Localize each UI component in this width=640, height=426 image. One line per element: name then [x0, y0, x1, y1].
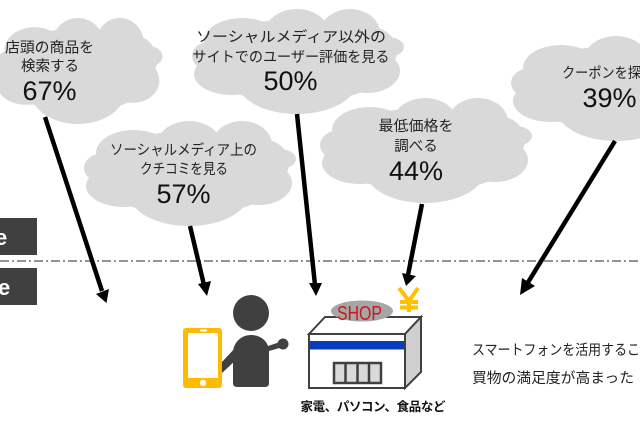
cloud: check lowest price 44%: 調べる [394, 139, 438, 155]
cloud: read social media reviews 57% [84, 121, 296, 226]
icon: yen sign [399, 288, 418, 312]
text block: smartphone use raises satisfaction [472, 342, 640, 387]
cloud: look for coupons 39%: 39% [582, 83, 637, 113]
cloud: search in-store products 67%: 検索する [21, 58, 79, 75]
cloud: read social media reviews 57%: 57% [156, 179, 211, 209]
icon: store building [309, 317, 421, 388]
cloud: read user ratings on other sites 50%: 50% [263, 66, 318, 96]
cloud: check lowest price 44% [320, 98, 532, 203]
label: lower dark box [0, 268, 37, 305]
icon: shop sign: SHOP [337, 303, 382, 325]
arrow: 39% cloud to result text [520, 141, 615, 295]
cloud: check lowest price 44%: 44% [389, 156, 443, 186]
caption: product categories: 家電、パソコン、食品など [300, 399, 446, 414]
cloud: read social media reviews 57%: ソーシャルメディア上の [110, 141, 257, 159]
cloud: read user ratings on other sites 50%: ソーシャルメディア以外の [196, 28, 386, 46]
cloud: look for coupons 39% [511, 36, 640, 141]
icon: smartphone [183, 328, 222, 388]
cloud: read social media reviews 57%: クチコミを見る [140, 161, 228, 178]
arrow: 57% cloud to phone [190, 226, 211, 296]
arrow: 50% cloud to store [297, 114, 322, 296]
icon: person [222, 295, 288, 387]
cloud: search in-store products 67%: 67% [22, 76, 77, 106]
cloud: read user ratings on other sites 50%: サイトでのユーザー評価を見る [192, 49, 390, 66]
cloud: search in-store products 67% [0, 18, 162, 124]
arrow: 67% cloud to lower area [45, 117, 109, 303]
cloud: check lowest price 44%: 最低価格を [378, 118, 454, 135]
cloud: search in-store products 67%: 店頭の商品を [5, 40, 94, 56]
cloud: read user ratings on other sites 50% [192, 9, 404, 114]
arrow: 44% cloud to price tag [402, 204, 422, 286]
label: upper dark box [0, 218, 37, 255]
text block: smartphone use raises satisfaction: 買物の満足度が高まった [472, 370, 634, 387]
